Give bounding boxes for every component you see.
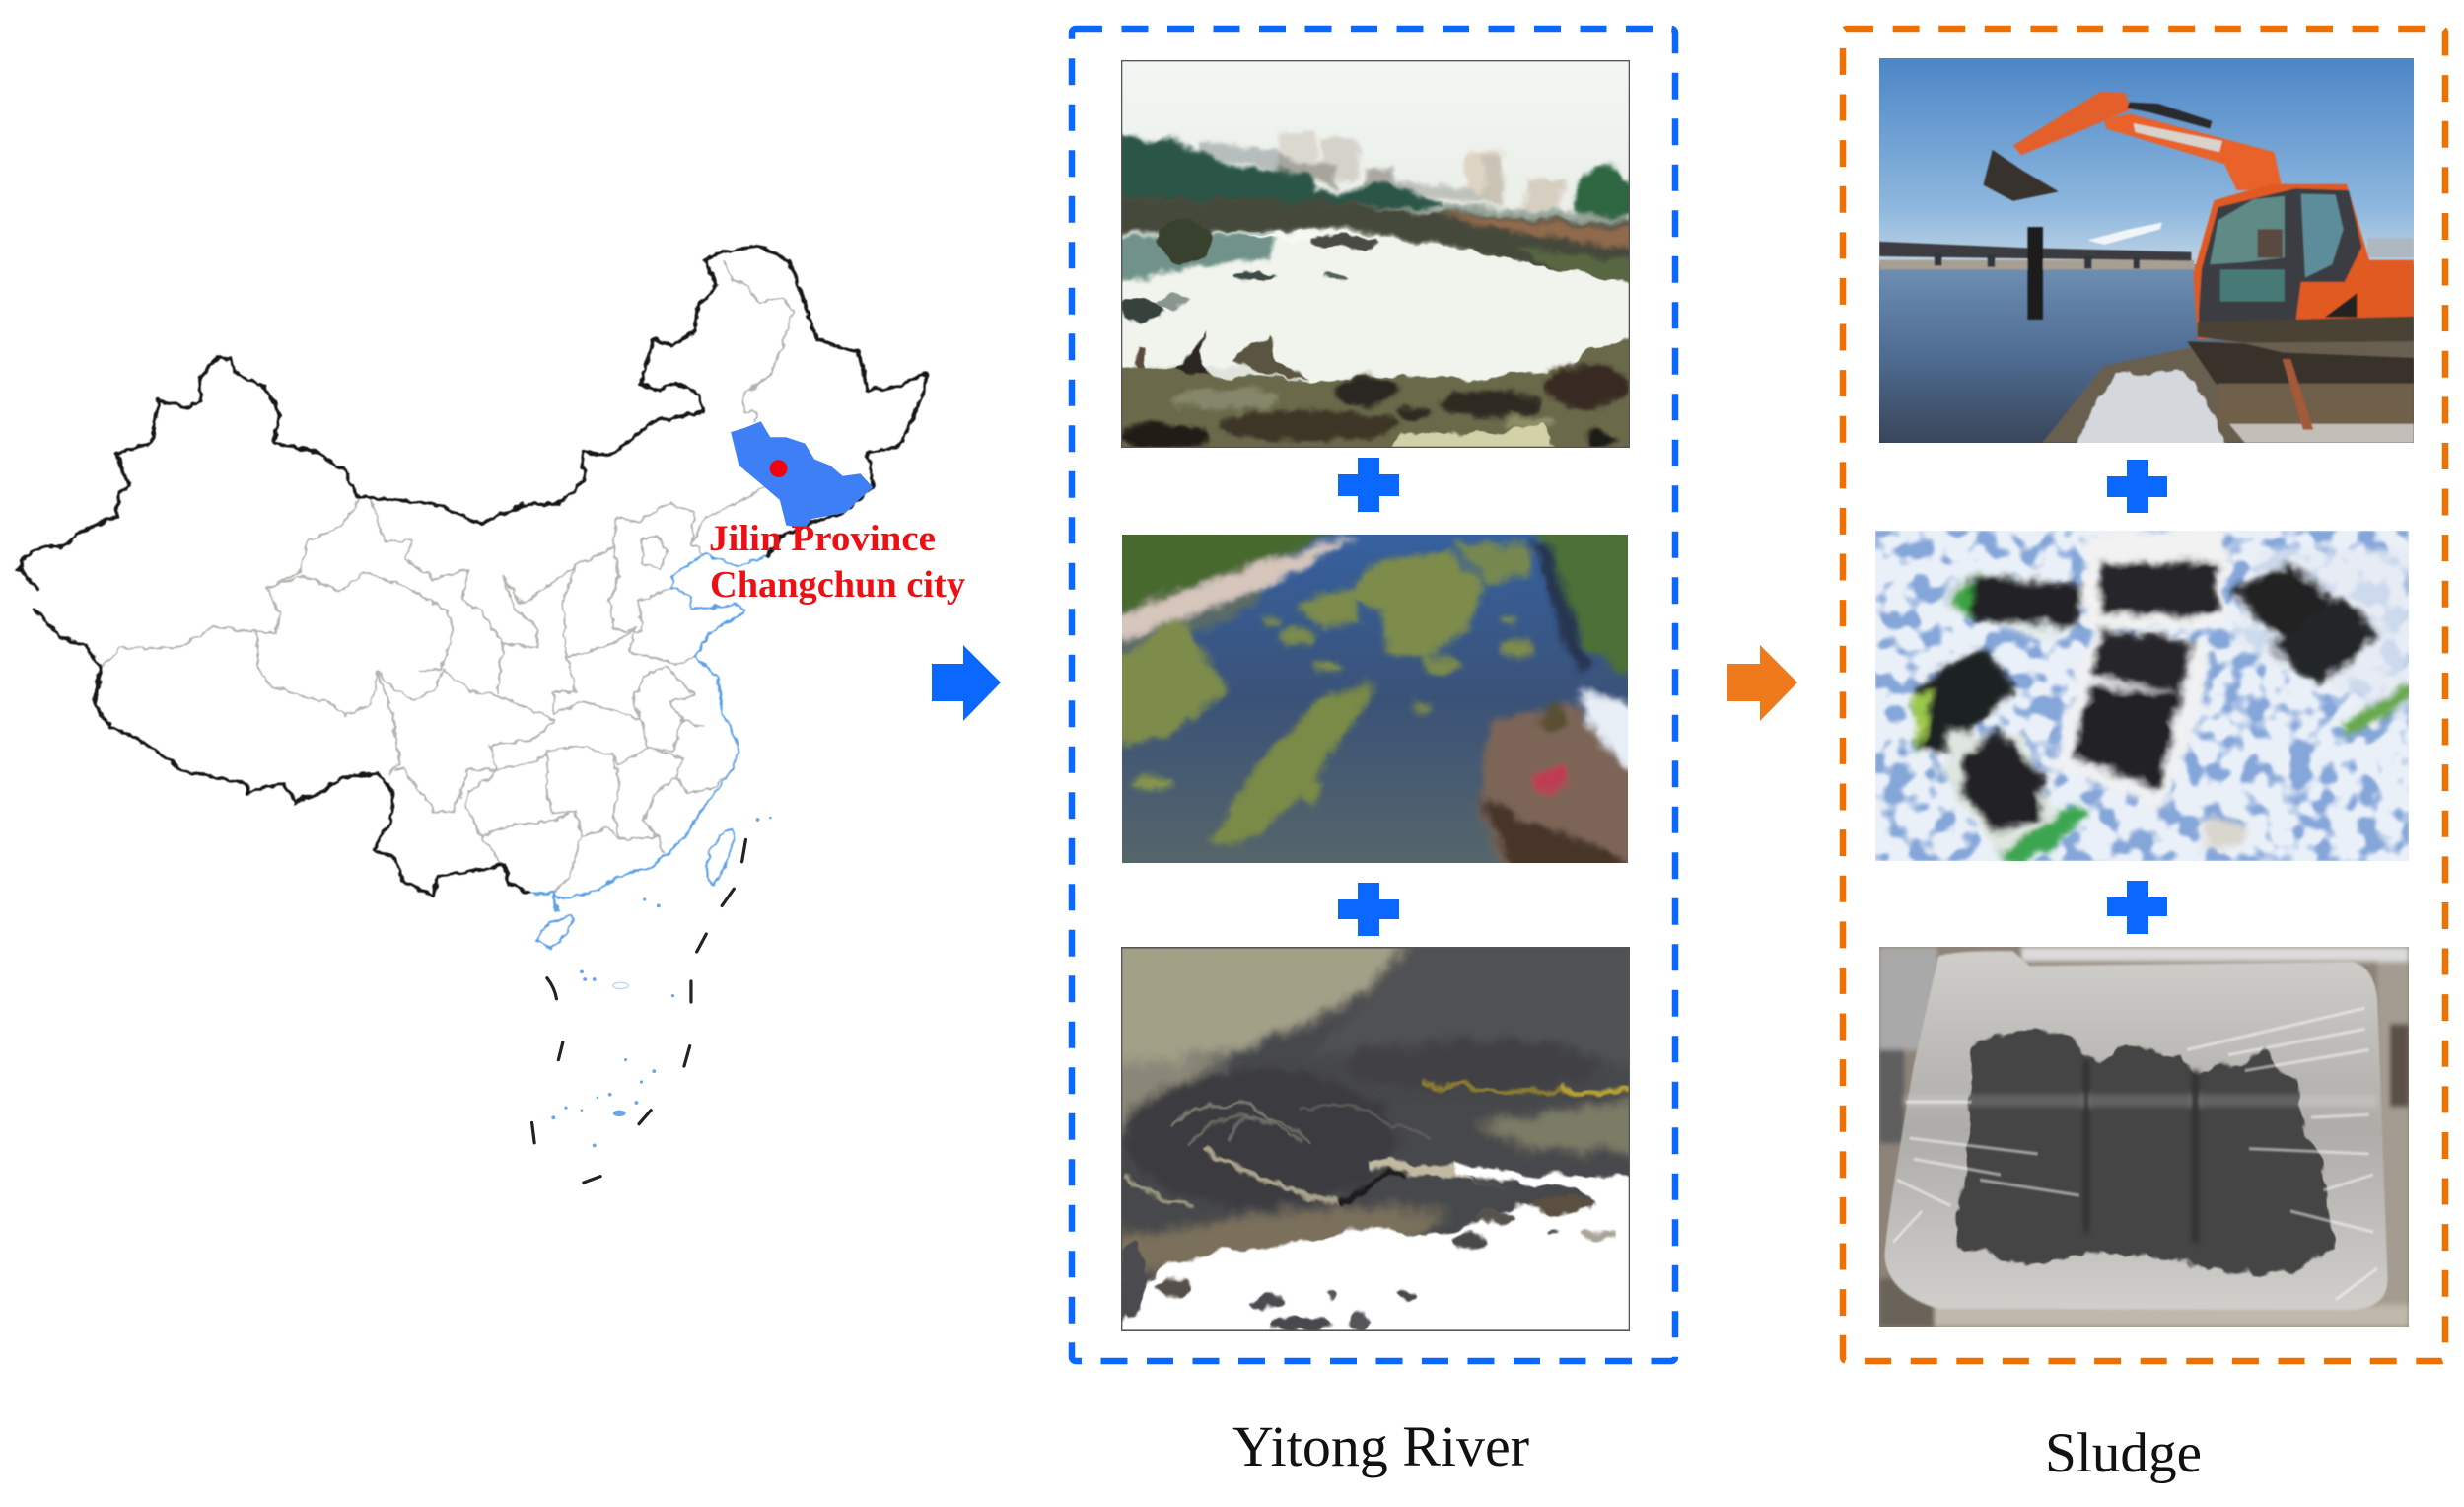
map label: Jilin Province: Jilin Province [709, 519, 936, 559]
panel: Yitong River dashed frame [1072, 29, 1675, 1361]
caption: Yitong River: Yitong River [1232, 1414, 1529, 1478]
Jilin Province region [731, 421, 873, 529]
national boundary [19, 246, 928, 897]
photo: sludge samples on snow [1875, 531, 2409, 861]
map label: Changchun city: Changchun city [710, 564, 965, 606]
South China Sea islands [551, 817, 772, 1147]
photo: sludge sample in wrapped tray [1879, 947, 2409, 1327]
arrow: river to sludge [1727, 645, 1797, 721]
map of China with Jilin Province highlighted [19, 246, 965, 1183]
caption: Sludge: Sludge [2045, 1422, 2202, 1484]
photo: black sludge on river shore [1121, 947, 1630, 1331]
icon: plus [2107, 460, 2167, 513]
photo: polluted river with city skyline [1121, 60, 1630, 448]
panel: Sludge dashed frame [1843, 29, 2445, 1361]
photo: aerial view of river with reeds [1122, 535, 1628, 863]
provincial boundaries [104, 261, 793, 894]
coastline and islands [528, 553, 768, 948]
snow shadow texture [1875, 531, 2409, 861]
icon: plus [1338, 458, 1399, 512]
Changchun marker [770, 460, 788, 477]
nine-dash line [532, 839, 745, 1183]
icon: plus [1338, 883, 1399, 936]
icon: plus [2107, 881, 2167, 934]
photo: excavator sampling sludge [1879, 58, 2414, 443]
arrow: map to river [932, 645, 1001, 721]
